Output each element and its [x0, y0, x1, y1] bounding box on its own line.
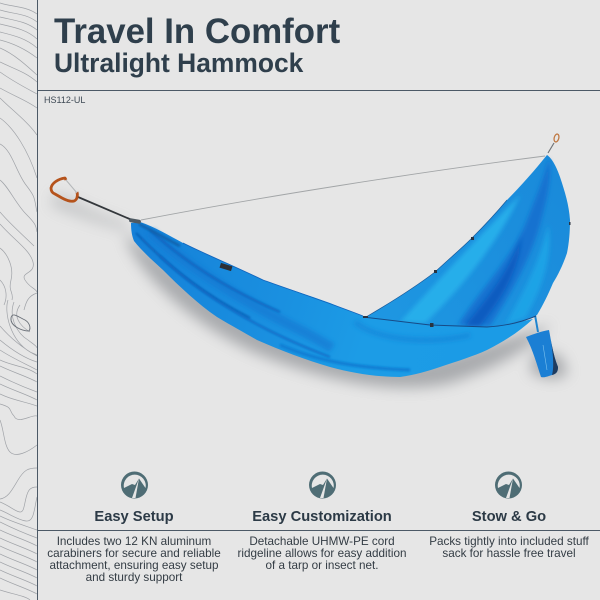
hammock front fabric — [131, 222, 533, 377]
heading: easy setup: Easy Setup — [94, 509, 174, 525]
hammock logo label — [220, 263, 232, 271]
ridgeline cord — [141, 156, 545, 220]
subtitle: Ultralight Hammock — [54, 48, 303, 78]
shadow — [50, 192, 568, 388]
text: easy setup: and sturdy support — [86, 571, 182, 584]
feature: stow and go — [495, 472, 522, 498]
stuff sack cord — [535, 315, 538, 332]
icon: mountain — [495, 472, 522, 498]
left carabiner — [51, 178, 77, 201]
attachment points — [129, 218, 571, 327]
text: stow and go: Packs tightly into included stuff — [429, 535, 589, 548]
right carabiner — [548, 134, 560, 153]
top edge binding — [183, 243, 363, 316]
feature: easy customization — [309, 472, 336, 498]
text: easy customization: Detachable UHMW-PE cord — [249, 535, 395, 548]
model code: HS112-UL — [44, 95, 85, 105]
topographic contour side panel — [0, 2, 37, 600]
icon: mountain — [309, 472, 336, 498]
text: easy customization — [238, 535, 406, 572]
suspension strap — [78, 197, 132, 220]
heading: stow and go: Stow & Go — [472, 509, 546, 525]
inner edge binding — [363, 316, 536, 327]
text: easy setup: carabiners for secure and reliable — [47, 547, 221, 560]
front fabric folds — [136, 224, 470, 370]
text: easy setup — [47, 535, 221, 584]
text: easy customization: ridgeline allows for easy addition — [238, 547, 406, 560]
heading: easy customization: Easy Customization — [252, 509, 392, 525]
text: easy setup: attachment, ensuring easy setup — [50, 559, 218, 572]
icon: mountain — [121, 472, 148, 498]
fabric folds — [400, 158, 550, 326]
text: stow and go: sack for hassle free travel — [442, 547, 576, 560]
feature: easy setup — [121, 472, 148, 498]
hammock back fabric — [366, 155, 570, 327]
text: stow and go — [429, 535, 589, 560]
title: Travel In Comfort — [54, 12, 340, 51]
text: easy setup: Includes two 12 KN aluminum — [57, 535, 211, 548]
text: easy customization: of a tarp or insect net. — [265, 559, 379, 572]
stuff sack — [526, 330, 558, 377]
